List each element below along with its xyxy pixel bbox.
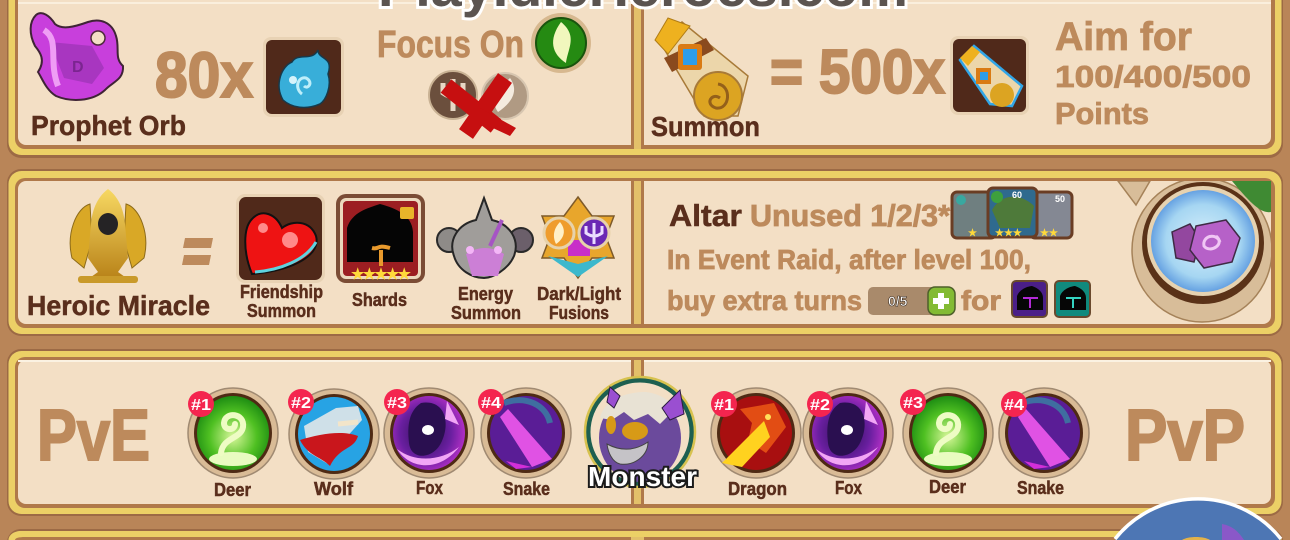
skill: Wolf PvE: #2 — [291, 395, 311, 412]
icon: equals sign — [182, 238, 213, 265]
skill: Fox PvE: #3 — [387, 395, 407, 412]
icon: summon scroll — [655, 18, 748, 120]
label: Friendship Summon: Summon — [247, 301, 316, 321]
icon: monster egg — [585, 377, 697, 492]
icon: turn counter: 0/5 — [888, 293, 908, 309]
icon: prophet orb: D — [72, 59, 84, 76]
panel: PvE and PvP skills — [7, 349, 1283, 516]
text: Altar Unused 1/2/3*: Altar — [669, 198, 742, 233]
icon: altar hero cards: ★ — [968, 228, 977, 239]
label: Energy Summon — [451, 284, 521, 323]
skill: Fox PvP: #2 — [810, 397, 830, 414]
icon: altar hero cards: ★★ — [1040, 228, 1058, 239]
skill: Fox PvE — [384, 388, 474, 498]
label: Prophet Orb: Prophet Orb — [31, 110, 186, 141]
label: Dark/Light Fusions: Fusions — [549, 303, 609, 323]
skill: Snake PvP: #4 — [1004, 397, 1024, 414]
text: for: for — [961, 285, 1001, 316]
icon: teal shard tile — [1055, 281, 1090, 317]
label: Dark/Light Fusions: Dark/Light — [537, 284, 621, 304]
icon: nature element — [531, 13, 591, 73]
icon: dark and light fusion star — [542, 197, 614, 278]
skill: Deer PvP: #3 — [903, 395, 923, 412]
skill: Snake PvE: Snake — [503, 479, 550, 499]
panel: next section top edge — [7, 529, 1283, 540]
label: Heroic Miracle: Heroic Miracle — [27, 290, 210, 321]
skill: Deer PvE: #1 — [191, 397, 211, 414]
text: Focus On: Focus On — [377, 24, 524, 66]
text: 80x: 80x — [155, 39, 253, 111]
icon: blue character badge — [1115, 499, 1281, 540]
icon: altar hero cards — [952, 188, 1072, 239]
icon: dark shard tile — [1012, 281, 1047, 317]
panel: heroic miracle and altar — [7, 169, 1283, 336]
panel: prophet orb and summon — [7, 0, 1283, 158]
skill: Snake PvP: Snake — [1017, 478, 1064, 498]
skill: Wolf PvE: Wolf — [314, 479, 354, 499]
skill: Dragon PvP: Dragon — [728, 479, 787, 499]
skill: Snake PvE: #4 — [481, 395, 501, 412]
icon: altar hero cards: ★★★ — [995, 228, 1022, 239]
skill: Snake PvE — [478, 388, 571, 499]
icon: altar hero cards: 60 — [1012, 190, 1022, 200]
icon: friendship heart tile — [236, 194, 325, 283]
text: 100/400/500: 100/400/500 — [1055, 59, 1251, 94]
label: Energy Summon: Summon — [451, 303, 521, 323]
icon: heroic miracle statue — [70, 189, 146, 283]
skill: Deer PvP: Deer — [929, 477, 966, 497]
skill: Dragon PvP: #1 — [714, 397, 734, 414]
text: Aim for: Aim for — [1055, 15, 1192, 59]
label: Friendship Summon — [240, 282, 323, 321]
text: = 500x: = 500x — [770, 38, 945, 107]
skill: Deer PvP — [900, 388, 993, 497]
skill: Deer PvE: Deer — [214, 480, 251, 500]
heading: PvE: PvE — [37, 396, 150, 476]
icon: altar stone medallion — [1118, 178, 1272, 322]
skill: Wolf PvE — [288, 389, 379, 499]
skill: Dragon PvP — [711, 388, 801, 499]
icon: crossed out dark and light elements — [429, 71, 528, 136]
text: Points: Points — [1055, 96, 1149, 131]
skill: Fox PvP: Fox — [835, 478, 862, 498]
text: buy extra turns: buy extra turns — [667, 285, 862, 316]
text: Altar Unused 1/2/3*: Unused 1/2/3* — [750, 198, 951, 233]
label: Summon: Summon — [651, 111, 760, 142]
skill: Fox PvP — [803, 388, 893, 498]
label: Shards: Shards — [352, 290, 407, 310]
label: Dark/Light Fusions — [537, 284, 621, 323]
skill: Fox PvE: Fox — [416, 478, 443, 498]
skill: Deer PvE — [188, 388, 278, 500]
icon: hero shards tile: ★★★★★ — [351, 266, 412, 283]
icon: blue orb tile — [263, 37, 344, 117]
icon: hero shards tile — [336, 194, 425, 283]
label: Friendship Summon: Friendship — [240, 282, 323, 302]
heading: PvP: PvP — [1125, 396, 1245, 476]
icon: scroll tile — [950, 36, 1029, 115]
text: In Event Raid: In Event Raid, after level 100, — [667, 244, 1031, 275]
label: Energy Summon: Energy — [458, 284, 513, 304]
icon: turn counter — [868, 287, 955, 315]
label: Monster: Monster — [588, 461, 697, 492]
skill: Snake PvP — [999, 388, 1089, 498]
icon: energy helmet — [437, 198, 533, 278]
icon: prophet orb — [31, 13, 123, 100]
icon: altar hero cards: 50 — [1055, 194, 1065, 204]
